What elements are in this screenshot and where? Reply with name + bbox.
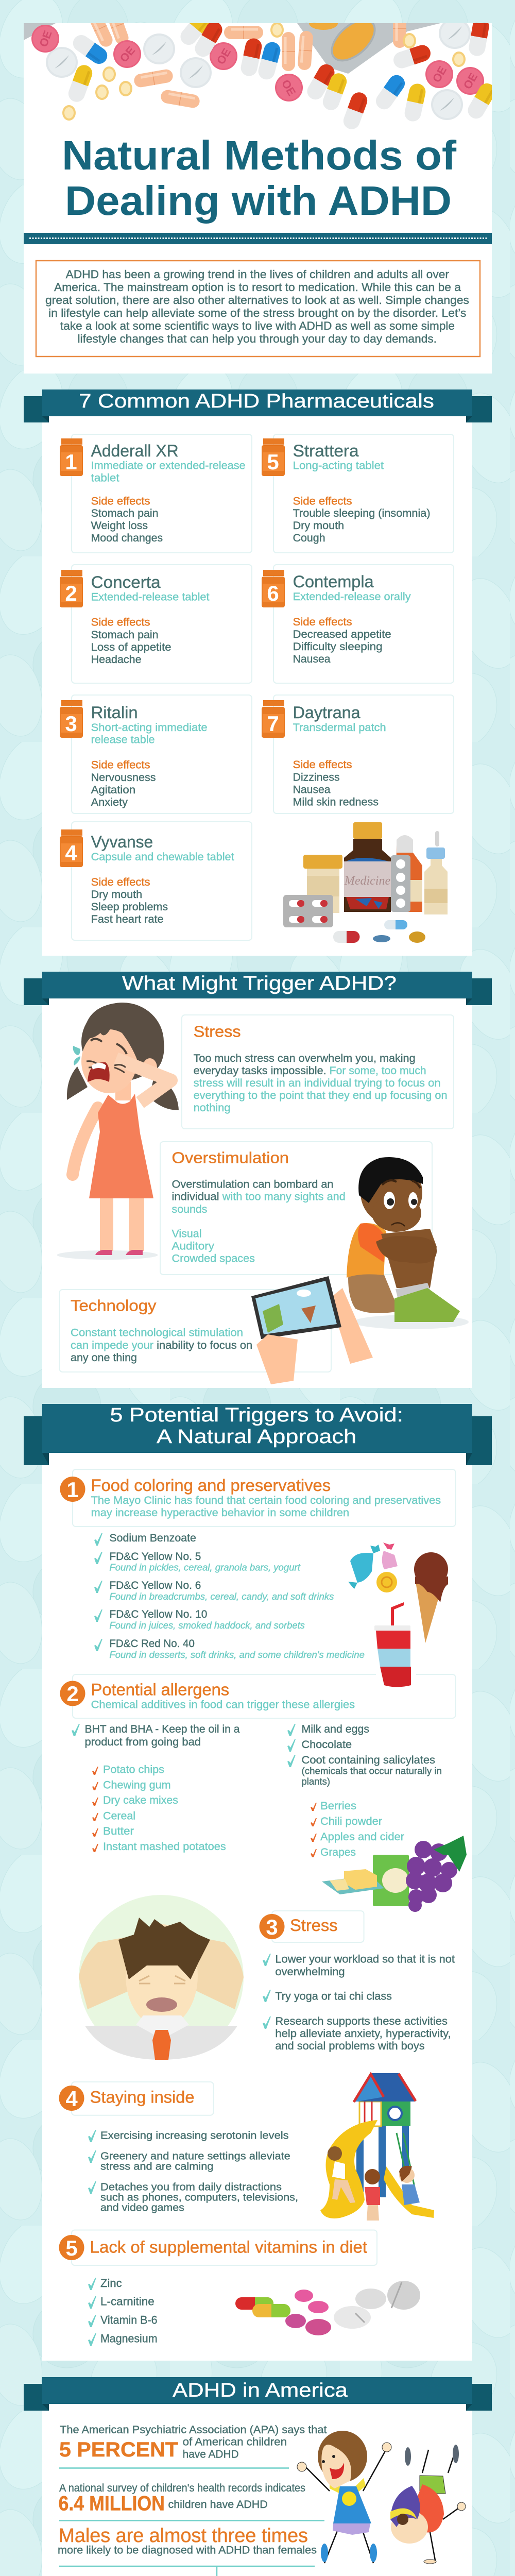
card: Ritalin: Agitation [91, 784, 135, 796]
card: overstimulation: sounds [172, 1204, 207, 1215]
card: Concerta: Side effects [91, 616, 150, 629]
card: Ritalin: Short-acting immediate [91, 722, 208, 734]
card: Contempla: Difficulty sleeping [293, 641, 383, 653]
list: stress tips: and social problems with boys [275, 2040, 425, 2052]
list: other allergens: plants) [302, 1776, 330, 1787]
card: stress: Too much stress can overwhelm you, making [194, 1053, 416, 1064]
illustration: scattered pills [24, 23, 492, 129]
list: BHT and BHA foods [72, 1723, 240, 1853]
list: food additives: Found in desserts, soft drinks, and some children's medicine [109, 1650, 365, 1660]
card: Strattera: 5 [267, 450, 279, 474]
card: Contempla: Decreased appetite [293, 629, 391, 640]
card: overstimulation: individual [172, 1191, 219, 1202]
card: Contempla: 6 [267, 581, 279, 605]
card: Ritalin: Anxiety [91, 796, 128, 808]
stat: 5 percent: 5 PERCENT [59, 2438, 178, 2461]
heading card: staying inside: 4 [65, 2087, 78, 2111]
card: Concerta: 2 [65, 581, 77, 605]
list: BHT and BHA foods: Potato chips [103, 1764, 164, 1775]
list: staying inside tips [88, 2130, 298, 2213]
card: Concerta: Headache [91, 654, 142, 666]
card: overstimulation: Auditory [172, 1241, 215, 1252]
card: Strattera: Side effects [293, 496, 352, 507]
card: Daytrana: 7 [267, 711, 279, 736]
card: Contempla: Nausea [293, 653, 331, 665]
card: technology [60, 1290, 331, 1372]
heading card: staying inside: Staying inside [90, 2088, 195, 2106]
intro text box: lifestyle changes that can help you through your day to day demands. [77, 332, 437, 345]
heading card: food coloring: may increase hyperactive behavior in some children [91, 1507, 349, 1519]
stat: males three times: more likely to be diagnosed with ADHD than females [58, 2544, 317, 2556]
card: Ritalin: Ritalin [91, 703, 138, 722]
illustration: two happy children [297, 2431, 466, 2564]
banner heading: natural approach: 5 Potential Triggers to Avoid: [110, 1404, 403, 1426]
card: overstimulation: with too many sights and [222, 1191, 346, 1202]
card: Adderall XR: Side effects [91, 496, 150, 507]
heading card: potential allergens: 2 [66, 1682, 79, 1706]
panel: 7 common pharmaceuticals [24, 389, 492, 956]
heading card: potential allergens: Chemical additives in food can trigger these allergies [91, 1699, 355, 1710]
list: food additives: Found in juices, smoked haddock, and sorbets [109, 1620, 305, 1631]
card: stress: Stress [194, 1022, 241, 1041]
list: stress tips: Research supports these activities [275, 2015, 448, 2027]
stat: 5 percent: have ADHD [183, 2448, 239, 2461]
list: food additives: FD&C Yellow No. 10 [109, 1608, 207, 1620]
card: Strattera: Trouble sleeping (insomnia) [293, 507, 431, 519]
list: vitamins: L-carnitine [100, 2295, 154, 2308]
card: technology: any one thing [71, 1352, 137, 1364]
card: Vyvanse: Side effects [91, 876, 150, 888]
card: Concerta: Extended-release tablet [91, 591, 210, 603]
intro text box: great solution, there are also other alternatives to look at as well. Simple changes [45, 294, 469, 307]
heading card: potential allergens: Potential allergens [91, 1681, 229, 1699]
list: food additives: FD&C Yellow No. 5 [109, 1551, 201, 1563]
illustration: scattered pills: OE [430, 64, 449, 84]
card: Contempla: Contempla [293, 572, 374, 591]
card: Strattera: Dry mouth [293, 520, 344, 532]
banner heading: natural approach [24, 1404, 492, 1465]
list: vitamins [88, 2277, 158, 2346]
list: food additives: Sodium Benzoate [109, 1532, 196, 1544]
card: Adderall XR: Weight loss [91, 520, 148, 532]
heading card: potential allergens [60, 1672, 455, 1718]
list: food additives: FD&C Red No. 40 [109, 1638, 195, 1650]
card: Strattera: Strattera [293, 442, 359, 460]
illustration: hands with tablet [251, 1276, 373, 1384]
title: Natural Methods of [62, 132, 456, 178]
banner heading: triggers [24, 972, 492, 1005]
list: vitamins: Zinc [100, 2277, 122, 2290]
list: food additives: Found in pickles, cereal, granola bars, yogurt [109, 1562, 301, 1572]
card: Contempla: Side effects [293, 616, 352, 628]
card: Adderall XR [60, 434, 252, 553]
list: BHT and BHA foods: BHT and BHA - Keep the oil in a [84, 1723, 240, 1735]
card: Daytrana: Mild skin redness [293, 796, 379, 808]
card: technology: Constant technological stimulation [71, 1327, 243, 1338]
list: other allergens: Apples and cider [320, 1831, 404, 1843]
list: stress tips: Try yoga or tai chi class [275, 1991, 392, 2002]
list: other allergens: Chocolate [302, 1739, 352, 1751]
card: Adderall XR: Adderall XR [91, 442, 179, 460]
card: overstimulation [160, 1142, 432, 1275]
list: food additives: Found in breadcrumbs, cereal, candy, and soft drinks [109, 1591, 334, 1602]
stat: 5 percent: The American Psychiatric Association (APA) says that [60, 2424, 327, 2436]
stat: 6.4 million: A national survey of children's health records indicates [59, 2482, 305, 2494]
card: Vyvanse: Vyvanse [91, 833, 153, 851]
list: food additives: FD&C Yellow No. 6 [109, 1580, 201, 1591]
banner heading: natural approach: A Natural Approach [157, 1426, 356, 1448]
panel: 5 potential triggers [24, 1404, 492, 2361]
stat: males three times: Males are almost three times [59, 2525, 308, 2547]
stat: 6.4 million: children have ADHD [168, 2499, 268, 2511]
card: stress: For some, too much [330, 1065, 426, 1077]
list: other allergens: Coot containing salicylates [302, 1754, 435, 1766]
illustration: supplements [235, 2281, 420, 2335]
card: Vyvanse: Dry mouth [91, 889, 142, 901]
stat: 5 percent [59, 2424, 327, 2461]
card: Contempla [262, 565, 454, 683]
card: Daytrana: Nausea [293, 784, 331, 795]
heading card: vitamins [59, 2230, 377, 2265]
illustration: medicine bottles [283, 822, 448, 943]
title: Dealing with ADHD [65, 178, 452, 224]
card: Ritalin [60, 695, 252, 814]
illustration: chips, butter and grapes [322, 1836, 467, 1912]
card: Strattera: Cough [293, 532, 325, 544]
banner heading: America: ADHD in America [173, 2380, 348, 2401]
list: staying inside tips: and video games [100, 2202, 184, 2213]
illustration: scattered pills: OE [37, 29, 55, 48]
list: staying inside tips: such as phones, computers, televisions, [100, 2192, 298, 2203]
card: Concerta: Stomach pain [91, 629, 159, 641]
panel: ADHD in America [24, 2377, 492, 2576]
heading card: food coloring: Food coloring and preservatives [91, 1476, 331, 1495]
illustration: children on playground [320, 2073, 434, 2221]
list: BHT and BHA foods: Instant mashed potatoes [103, 1841, 226, 1853]
list: other allergens [287, 1723, 442, 1858]
list: stress tips: overwhelming [275, 1966, 345, 1978]
intro text box: in lifestyle can help alleviate some of the stress brought on by the disorder. Let’s [48, 307, 467, 319]
card: Ritalin: release table [91, 734, 155, 746]
list: staying inside tips: Greenery and nature settings alleviate [100, 2150, 290, 2162]
card: technology: can impede your [71, 1340, 153, 1351]
card: Vyvanse: Fast heart rate [91, 913, 164, 925]
intro text box: take a look at some scientific ways to live with ADHD as well as some simple [60, 319, 455, 332]
banner heading: pharmaceuticals [24, 389, 492, 422]
heading card: food coloring [60, 1469, 455, 1527]
card: Adderall XR: 1 [65, 450, 77, 474]
card: Adderall XR: Immediate or extended-release [91, 460, 246, 472]
panel: title header [24, 5, 498, 374]
card: Vyvanse: Capsule and chewable tablet [91, 851, 234, 863]
stat: males three times [58, 2525, 317, 2556]
card: stress: stress will result in an individual trying to focus on [194, 1077, 441, 1089]
heading card: food coloring: 1 [66, 1478, 79, 1502]
card: Concerta: Loss of appetite [91, 641, 171, 653]
list: BHT and BHA foods: Butter [103, 1825, 134, 1837]
card: Vyvanse: 4 [65, 841, 77, 865]
list: stress tips: help alleviate anxiety, hyperactivity, [275, 2028, 451, 2040]
banner heading: pharmaceuticals: 7 Common ADHD Pharmaceuticals [79, 391, 434, 412]
list: stress tips: Lower your workload so that it is not [275, 1954, 455, 1965]
heading card: staying inside [59, 2082, 213, 2115]
card: Vyvanse [60, 822, 252, 940]
card: Adderall XR: tablet [91, 472, 119, 484]
card: Ritalin: Side effects [91, 759, 150, 771]
list: other allergens: Milk and eggs [302, 1723, 369, 1735]
list: BHT and BHA foods: Cereal [103, 1810, 135, 1822]
stat: 5 percent: of American children [183, 2436, 287, 2448]
card: stress [182, 1015, 454, 1129]
card: Contempla: Extended-release orally [293, 591, 411, 603]
list: staying inside tips: stress and are calming [100, 2161, 213, 2172]
list: other allergens: Grapes [320, 1846, 356, 1858]
heading card: stress: 3 [266, 1915, 278, 1939]
illustration: scattered pills: OE [279, 77, 298, 98]
card: overstimulation: Crowded spaces [172, 1253, 255, 1264]
banner heading: America [24, 2377, 492, 2411]
list: other allergens: (chemicals that occur naturally in [302, 1766, 442, 1776]
list: BHT and BHA foods: Dry cake mixes [103, 1794, 178, 1806]
card: Daytrana: Dizziness [293, 772, 340, 783]
banner heading: triggers: What Might Trigger ADHD? [122, 973, 397, 994]
list: BHT and BHA foods: product from going bad [84, 1736, 201, 1748]
card: Strattera [262, 434, 454, 553]
card: Daytrana: Transdermal patch [293, 722, 386, 734]
heading card: vitamins: Lack of supplemental vitamins in diet [90, 2238, 367, 2257]
list: stress tips [263, 1954, 455, 2052]
list: BHT and BHA foods: Chewing gum [103, 1780, 171, 1791]
title [62, 132, 456, 224]
list: food additives [94, 1532, 365, 1660]
illustration: sad boy [347, 1157, 469, 1329]
panel: what might trigger ADHD [24, 972, 492, 1388]
intro text box [36, 261, 480, 357]
card: Strattera: Long-acting tablet [293, 460, 384, 472]
illustration: stressed man [79, 1895, 244, 2060]
illustration: scattered pills: OE [214, 46, 233, 66]
card: Concerta: Concerta [91, 573, 161, 591]
illustration: scattered pills: OE [117, 44, 138, 65]
stat: 6.4 million: 6.4 MILLION [59, 2493, 165, 2515]
card: stress: nothing [194, 1102, 231, 1114]
card: Adderall XR: Mood changes [91, 532, 163, 544]
list: staying inside tips: Detaches you from daily distractions [100, 2181, 282, 2193]
card: Concerta [60, 565, 252, 683]
card: overstimulation: Overstimulation can bombard an [172, 1179, 334, 1190]
list: vitamins: Vitamin B-6 [100, 2313, 158, 2327]
card: Daytrana: Side effects [293, 759, 352, 771]
card: technology: inability to focus on [157, 1340, 252, 1351]
card: overstimulation: Visual [172, 1228, 202, 1240]
card: Adderall XR: Stomach pain [91, 507, 159, 519]
list: staying inside tips: Exercising increasing serotonin levels [100, 2130, 289, 2141]
illustration: scattered pills: OE [461, 71, 480, 91]
card: stress: everyday tasks impossible. [194, 1065, 327, 1077]
card: stress: everything to the point that they end up focusing on [194, 1090, 448, 1101]
heading card: vitamins: 5 [65, 2236, 78, 2260]
stat: 6.4 million [59, 2482, 305, 2515]
card: Vyvanse: Sleep problems [91, 901, 168, 913]
card: technology: Technology [71, 1296, 157, 1315]
illustration: candy, ice cream and soda [348, 1543, 448, 1687]
card: Ritalin: Nervousness [91, 772, 156, 784]
intro text box: America. The mainstream option is to resort to medication. While this can be a [54, 281, 461, 294]
heading card: stress [260, 1911, 364, 1942]
heading card: stress: Stress [290, 1916, 338, 1935]
card: Daytrana: Daytrana [293, 703, 360, 722]
illustration: medicine bottles: Medicine [344, 874, 390, 888]
card: overstimulation: Overstimulation [172, 1149, 289, 1166]
heading card: food coloring: The Mayo Clinic has found that certain food coloring and preservatives [91, 1495, 441, 1506]
list: other allergens: Berries [320, 1800, 356, 1812]
illustration: crying girl [57, 1003, 179, 1260]
card: Ritalin: 3 [65, 711, 77, 736]
intro text box: ADHD has been a growing trend in the lives of children and adults all over [66, 268, 449, 281]
card: Daytrana [262, 695, 454, 814]
list: other allergens: Chili powder [320, 1816, 382, 1827]
list: vitamins: Magnesium [100, 2332, 158, 2345]
